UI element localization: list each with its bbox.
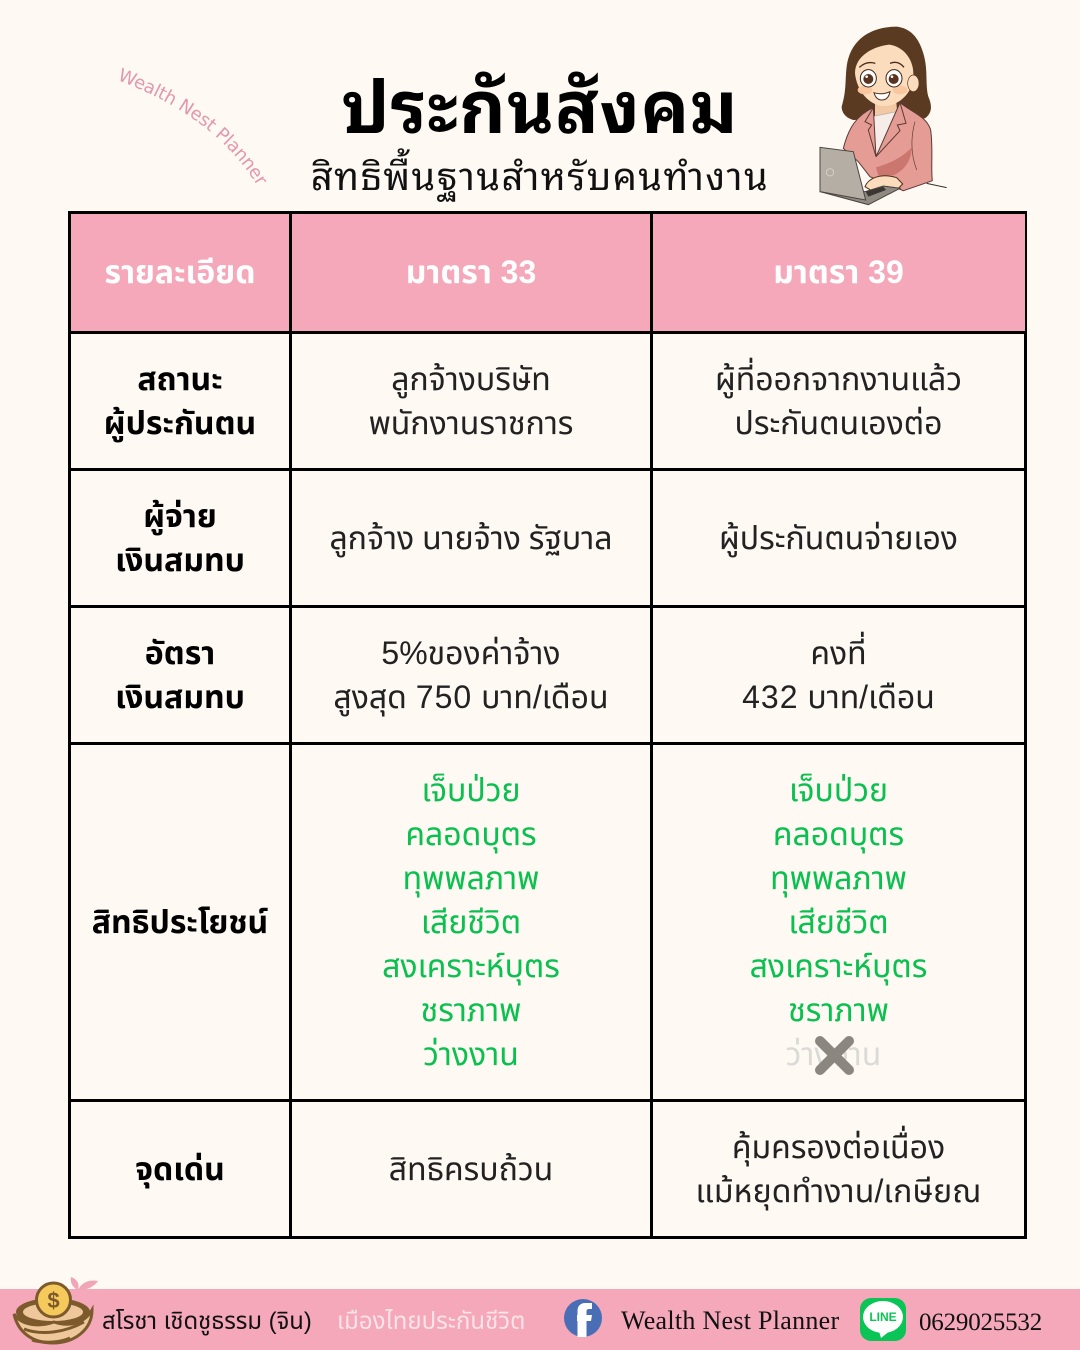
rate: section 39 bbox=[742, 632, 935, 715]
watermark: curved brand text: Wealth Nest Planner bbox=[120, 68, 266, 183]
highlight: section 33: สิทธิครบถ้วน bbox=[389, 1151, 553, 1187]
benefits: section 33: คลอดบุตร bbox=[405, 816, 537, 852]
status: section 33: ลูกจ้างบริษัท bbox=[391, 361, 551, 397]
footer band bbox=[0, 1289, 1080, 1350]
row label: rate: เงินสมทบ bbox=[115, 678, 245, 714]
row label: payer: เงินสมทบ bbox=[115, 542, 245, 578]
icon: line: LINE bbox=[869, 1310, 897, 1324]
header: section 33 bbox=[292, 214, 650, 331]
header: section 39 bbox=[652, 214, 1024, 331]
row label: rate: อัตรา bbox=[145, 634, 215, 670]
header: section 33: มาตรา 33 bbox=[406, 254, 536, 290]
title: ประกันสังคม bbox=[341, 44, 738, 159]
payer: section 33: ลูกจ้าง นายจ้าง รัฐบาล bbox=[330, 520, 612, 556]
status: section 39: ผู้ที่ออกจากงานแล้ว bbox=[715, 361, 962, 397]
rate: section 33 bbox=[333, 635, 609, 716]
rate: section 39: 432 บาท/เดือน bbox=[742, 679, 935, 715]
row label: benefits: สิทธิประโยชน์ bbox=[92, 904, 268, 940]
benefits: section 39: ว่างงาน bbox=[786, 1036, 881, 1072]
benefits: section 33: สงเคราะห์บุตร bbox=[382, 948, 560, 984]
icon: cross mark bbox=[815, 1036, 854, 1075]
highlight: section 39: คุ้มครองต่อเนื่อง bbox=[732, 1129, 945, 1165]
rate: section 33: สูงสุด 750 บาท/เดือน bbox=[333, 679, 609, 715]
icon: line bbox=[860, 1298, 906, 1341]
benefits: section 39: ทุพพลภาพ bbox=[770, 860, 907, 896]
header: details: รายละเอียด bbox=[104, 254, 255, 290]
row label: payer bbox=[115, 498, 245, 578]
status: section 33: พนักงานราชการ bbox=[369, 405, 573, 441]
footer: facebook name: Wealth Nest Planner bbox=[621, 1306, 839, 1335]
benefits: section 39: เสียชีวิต bbox=[788, 904, 889, 940]
benefits: section 33: ทุพพลภาพ bbox=[403, 860, 539, 896]
benefits: section 33: เจ็บป่วย bbox=[422, 772, 520, 808]
payer: section 39: ผู้ประกันตนจ่ายเอง bbox=[719, 520, 958, 556]
benefits: section 39: สงเคราะห์บุตร bbox=[750, 948, 927, 984]
benefits: section 39: เจ็บป่วย bbox=[789, 772, 888, 808]
benefits: section 39 bbox=[750, 772, 927, 1072]
row label: status bbox=[104, 360, 256, 442]
header row: background bbox=[70, 213, 1025, 331]
header: section 39: มาตรา 39 bbox=[773, 254, 904, 290]
benefits: section 33 bbox=[382, 772, 560, 1072]
status: section 33 bbox=[369, 361, 573, 441]
benefits: section 33: ชราภาพ bbox=[421, 992, 521, 1028]
icon: facebook bbox=[564, 1299, 602, 1337]
benefits: section 39: คลอดบุตร bbox=[773, 816, 904, 852]
row label: status: สถานะ bbox=[137, 360, 223, 396]
rate: section 33: 5%ของค่าจ้าง bbox=[381, 635, 561, 671]
rate: section 39: คงที่ bbox=[810, 635, 867, 671]
icon: nest with coin bbox=[12, 1277, 98, 1344]
footer: company: เมืองไทยประกันชีวิต bbox=[337, 1308, 525, 1335]
benefits: section 33: ว่างงาน bbox=[423, 1036, 519, 1072]
row label: highlight: จุดเด่น bbox=[135, 1150, 225, 1186]
subtitle: สิทธิพื้นฐานสำหรับคนทำงาน bbox=[311, 143, 769, 204]
header: details bbox=[71, 214, 289, 331]
row label: payer: ผู้จ่าย bbox=[143, 498, 217, 534]
footer: name: สโรชา เชิดชูธรรม (จิน) bbox=[102, 1308, 312, 1335]
icon: woman working on laptop bbox=[820, 26, 947, 206]
row label: rate bbox=[115, 634, 245, 714]
status: section 39: ประกันตนเองต่อ bbox=[735, 405, 942, 441]
benefits: section 33: เสียชีวิต bbox=[421, 904, 521, 940]
highlight: section 39: แม้หยุดทำงาน/เกษียณ bbox=[696, 1173, 981, 1209]
status: section 39 bbox=[715, 358, 962, 441]
row label: status: ผู้ประกันตน bbox=[104, 404, 256, 440]
highlight: section 39 bbox=[696, 1126, 981, 1210]
footer: phone: 0629025532 bbox=[919, 1309, 1042, 1336]
icon: nest with coin: $ bbox=[47, 1288, 60, 1313]
benefits: section 39: ชราภาพ bbox=[788, 992, 889, 1028]
